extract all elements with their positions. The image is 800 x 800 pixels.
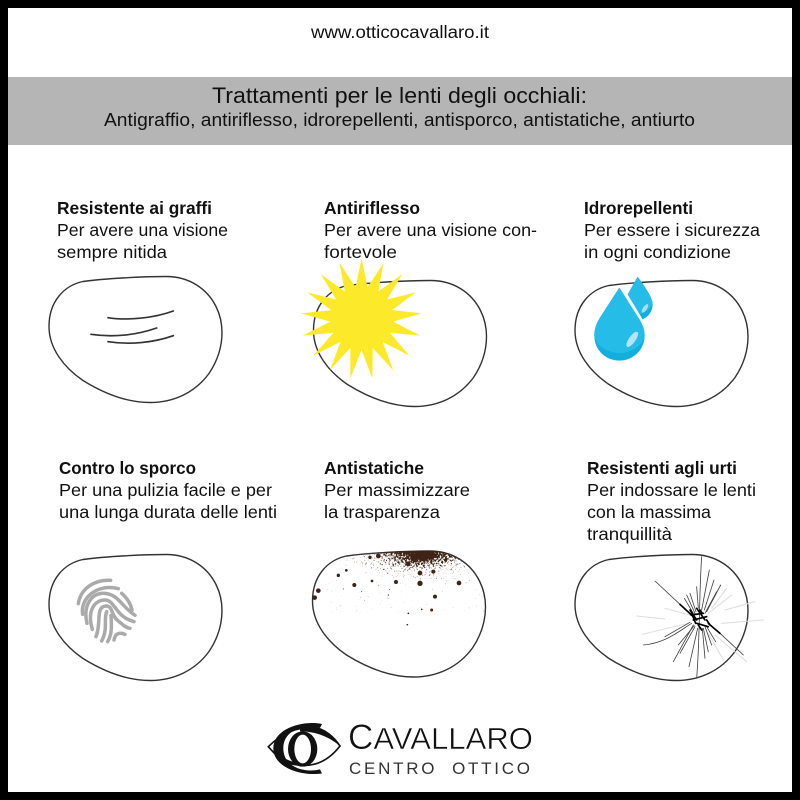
text block: in ogni condizione [584, 242, 731, 262]
panel: antistatiche [312, 458, 486, 677]
panel: contro lo sporco [49, 458, 277, 680]
text block: Per essere i sicurezza [584, 220, 760, 240]
lens outline [49, 554, 222, 680]
text block [587, 458, 756, 544]
text block: sempre nitida [57, 242, 167, 262]
panel: resistente ai graffi [49, 198, 228, 402]
icon: sun glare [301, 258, 422, 378]
icon: eye logo [268, 723, 340, 774]
heading: Trattamenti per le lenti degli occhiali: [212, 83, 587, 108]
text block: tranquillità [587, 524, 672, 544]
brand tagline: CENTRO OTTICO [349, 759, 530, 778]
text block: Resistenti agli urti [587, 458, 737, 478]
text block [324, 198, 537, 262]
icon: dust particles [312, 551, 485, 625]
logo [268, 718, 533, 778]
text block: Per avere una visione [57, 220, 228, 240]
lens outline [312, 551, 486, 677]
text block: Idrorepellenti [584, 198, 693, 218]
text block: con la massima [587, 502, 711, 522]
text block: Per massimizzare [324, 480, 470, 500]
lens outline [314, 280, 486, 406]
text block: Contro lo sporco [59, 458, 196, 478]
text block: Resistente ai graffi [57, 198, 212, 218]
icon: fingerprint [78, 580, 135, 642]
panel: idrorepellenti [575, 198, 760, 406]
lens outline [575, 280, 748, 406]
website url: www.otticocavallaro.it [310, 22, 489, 42]
text block: Per indossare le lenti [587, 480, 756, 500]
icon: scratches [91, 311, 173, 343]
text block [57, 198, 228, 262]
text block: la trasparenza [324, 502, 440, 522]
panel: antiriflesso [301, 198, 537, 406]
text block [324, 458, 470, 522]
subheading: Antigraffio, antiriflesso, idrorepellenti, antisporco, antistatiche, antiurto [104, 110, 695, 130]
lens outline [49, 276, 222, 402]
icon: water drops [594, 277, 653, 361]
panel: resistenti agli urti [575, 458, 763, 680]
text block: una lunga durata delle lenti [59, 502, 277, 522]
brand name: CAVALLARO [348, 718, 533, 757]
lens outline [575, 554, 748, 680]
text block [59, 458, 277, 522]
text block [584, 198, 760, 262]
text block: Antistatiche [324, 458, 424, 478]
text block: Per avere una visione con- [324, 220, 537, 240]
text block: Antiriflesso [324, 198, 420, 218]
icon: cracked glass [637, 557, 763, 678]
header band [8, 77, 792, 145]
text block: Per una pulizia facile e per [59, 480, 272, 500]
text block: fortevole [324, 242, 397, 262]
